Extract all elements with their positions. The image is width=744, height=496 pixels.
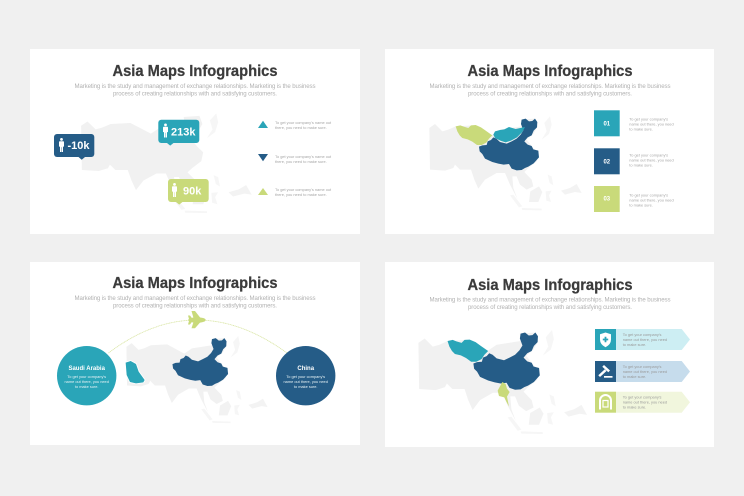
item 01: To get your company's <box>629 116 668 122</box>
country: Saudi Arabia <box>126 361 145 383</box>
bubble: -10k <box>54 134 94 160</box>
map: highlighted countries <box>429 116 582 210</box>
subtitle <box>430 296 670 311</box>
circle: China <box>276 346 335 405</box>
item 03: 03 <box>603 196 611 202</box>
row: gavel: name out there, you need <box>623 369 667 374</box>
circle: China: To get your company's <box>286 374 325 379</box>
circle: China: name out there, you need <box>284 379 328 384</box>
row: shield: to make sure. <box>623 342 646 347</box>
row: tunnel: To get your company's <box>623 394 662 400</box>
legend item: teal triangle <box>258 120 332 130</box>
legend item: lime triangle: To get your company's name out <box>275 187 332 192</box>
circle: Saudi Arabia: to make sure. <box>75 384 98 389</box>
icon: tunnel <box>600 395 611 410</box>
row: shield <box>595 329 690 350</box>
heading: Asia Maps Infographics <box>112 275 278 292</box>
legend item: navy triangle: To get your company's name out <box>275 154 332 159</box>
legend item: teal triangle: there, you need to make sure. <box>275 125 327 130</box>
item 03 <box>594 186 674 212</box>
bubble: 213k <box>158 120 199 146</box>
subtitle <box>74 295 316 310</box>
map: Asia <box>81 113 252 213</box>
legend item: navy triangle <box>258 154 332 164</box>
subtitle: process of creating relationships with and satisfying customers. <box>468 304 632 311</box>
circle: China: China <box>297 366 315 372</box>
circle: Saudi Arabia: Saudi Arabia <box>68 366 106 372</box>
panel: population bubbles <box>30 49 360 234</box>
item 01: 01 <box>603 122 611 128</box>
row: tunnel: name out there, you need <box>623 400 667 404</box>
row: gavel <box>595 361 690 382</box>
panel: arrows with icons <box>385 262 714 447</box>
bubble: 213k: 213k <box>171 126 196 138</box>
bubble: -10k: -10k <box>68 140 90 152</box>
subtitle: Marketing is the study and management of exchange relationships. Marketing is the business <box>74 295 316 302</box>
bubble: 90k <box>168 179 209 205</box>
heading: Asia Maps Infographics <box>112 63 278 80</box>
panel: flight route <box>30 262 360 445</box>
row: tunnel <box>595 392 690 413</box>
item 02: To get your company's <box>629 152 668 158</box>
map: highlighted countries <box>418 330 587 434</box>
item 02: to make sure. <box>629 162 653 168</box>
route arc <box>108 320 287 353</box>
subtitle: Marketing is the study and management of exchange relationships. Marketing is the business <box>430 83 670 90</box>
subtitle: Marketing is the study and management of exchange relationships. Marketing is the business <box>74 83 316 90</box>
legend item: lime triangle: there, you need to make sure. <box>275 192 327 197</box>
legend item: teal triangle: To get your company's name out <box>275 120 332 125</box>
circle: Saudi Arabia <box>57 346 116 405</box>
heading: Asia Maps Infographics <box>468 63 632 80</box>
subtitle: Marketing is the study and management of exchange relationships. Marketing is the business <box>430 296 670 304</box>
circle: China: to make sure. <box>294 384 317 389</box>
item 01: name out there, you need <box>629 122 674 126</box>
item 02: name out there, you need <box>629 158 674 162</box>
icon: gavel <box>598 365 612 378</box>
icon: shield <box>600 332 611 347</box>
subtitle <box>430 83 670 98</box>
circle: Saudi Arabia: To get your company's <box>67 374 106 379</box>
legend item: lime triangle <box>258 187 332 197</box>
legend item: navy triangle: there, you need to make sure. <box>275 159 327 164</box>
row: shield: To get your company's <box>623 332 662 337</box>
row: gavel: to make sure. <box>623 374 646 379</box>
panel: numbered regions <box>385 49 714 234</box>
item 01: to make sure. <box>629 126 653 132</box>
item 02: 02 <box>603 160 611 166</box>
subtitle: process of creating relationships with and satisfying customers. <box>113 90 277 98</box>
heading: Asia Maps Infographics <box>468 277 632 294</box>
item 03: name out there, you need <box>629 198 674 202</box>
item 03: to make sure. <box>629 202 653 208</box>
bubble: 90k: 90k <box>183 185 202 197</box>
icon: plane <box>188 311 206 328</box>
circle: Saudi Arabia: name out there, you need <box>65 379 109 384</box>
item 03: To get your company's <box>629 192 668 198</box>
subtitle <box>74 83 316 98</box>
map: Asia with China and Saudi Arabia <box>126 336 268 423</box>
row: shield: name out there, you need <box>623 337 667 342</box>
subtitle: process of creating relationships with and satisfying customers. <box>113 302 277 310</box>
item 02 <box>594 148 674 174</box>
subtitle: process of creating relationships with and satisfying customers. <box>468 90 632 98</box>
row: tunnel: to make sure. <box>623 404 646 410</box>
item 01 <box>594 110 674 136</box>
row: gavel: To get your company's <box>623 364 662 369</box>
country: Myanmar <box>498 382 510 407</box>
